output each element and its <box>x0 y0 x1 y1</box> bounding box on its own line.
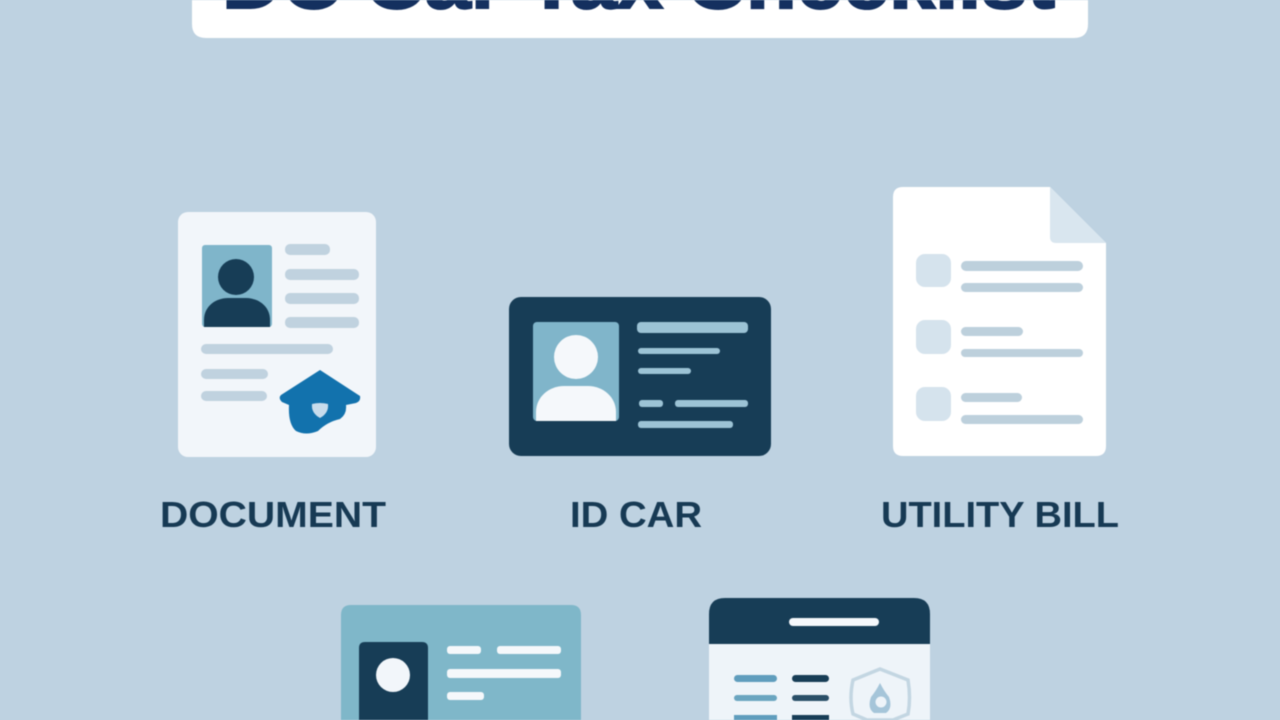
panel: teal card <box>341 605 581 720</box>
document text lines <box>201 244 359 401</box>
label: id car: ID CAR <box>570 494 702 535</box>
icon: shield badge <box>851 669 910 720</box>
panel: utility bill <box>881 187 1119 535</box>
id card body <box>509 297 771 456</box>
label: document: DOCUMENT <box>160 494 386 535</box>
title banner <box>192 0 1088 38</box>
id card photo <box>533 322 619 421</box>
bill text lines <box>961 261 1083 424</box>
bill sheet <box>893 187 1106 456</box>
bill folded corner <box>1050 187 1106 243</box>
document sheet <box>178 212 376 457</box>
form body <box>709 630 930 720</box>
form header <box>709 598 930 644</box>
bill checkboxes <box>916 254 951 421</box>
id card text lines <box>637 322 748 428</box>
label: utility bill: UTILITY BILL <box>881 494 1119 535</box>
teal card text lines <box>447 646 561 700</box>
teal card body <box>341 605 581 720</box>
form rows <box>734 675 829 720</box>
document portrait photo <box>202 245 272 327</box>
panel: web form <box>709 598 930 720</box>
icon: blue house stamp <box>280 370 360 434</box>
teal card photo <box>359 642 428 720</box>
panel: document <box>160 212 386 535</box>
panel: id card <box>509 297 771 535</box>
